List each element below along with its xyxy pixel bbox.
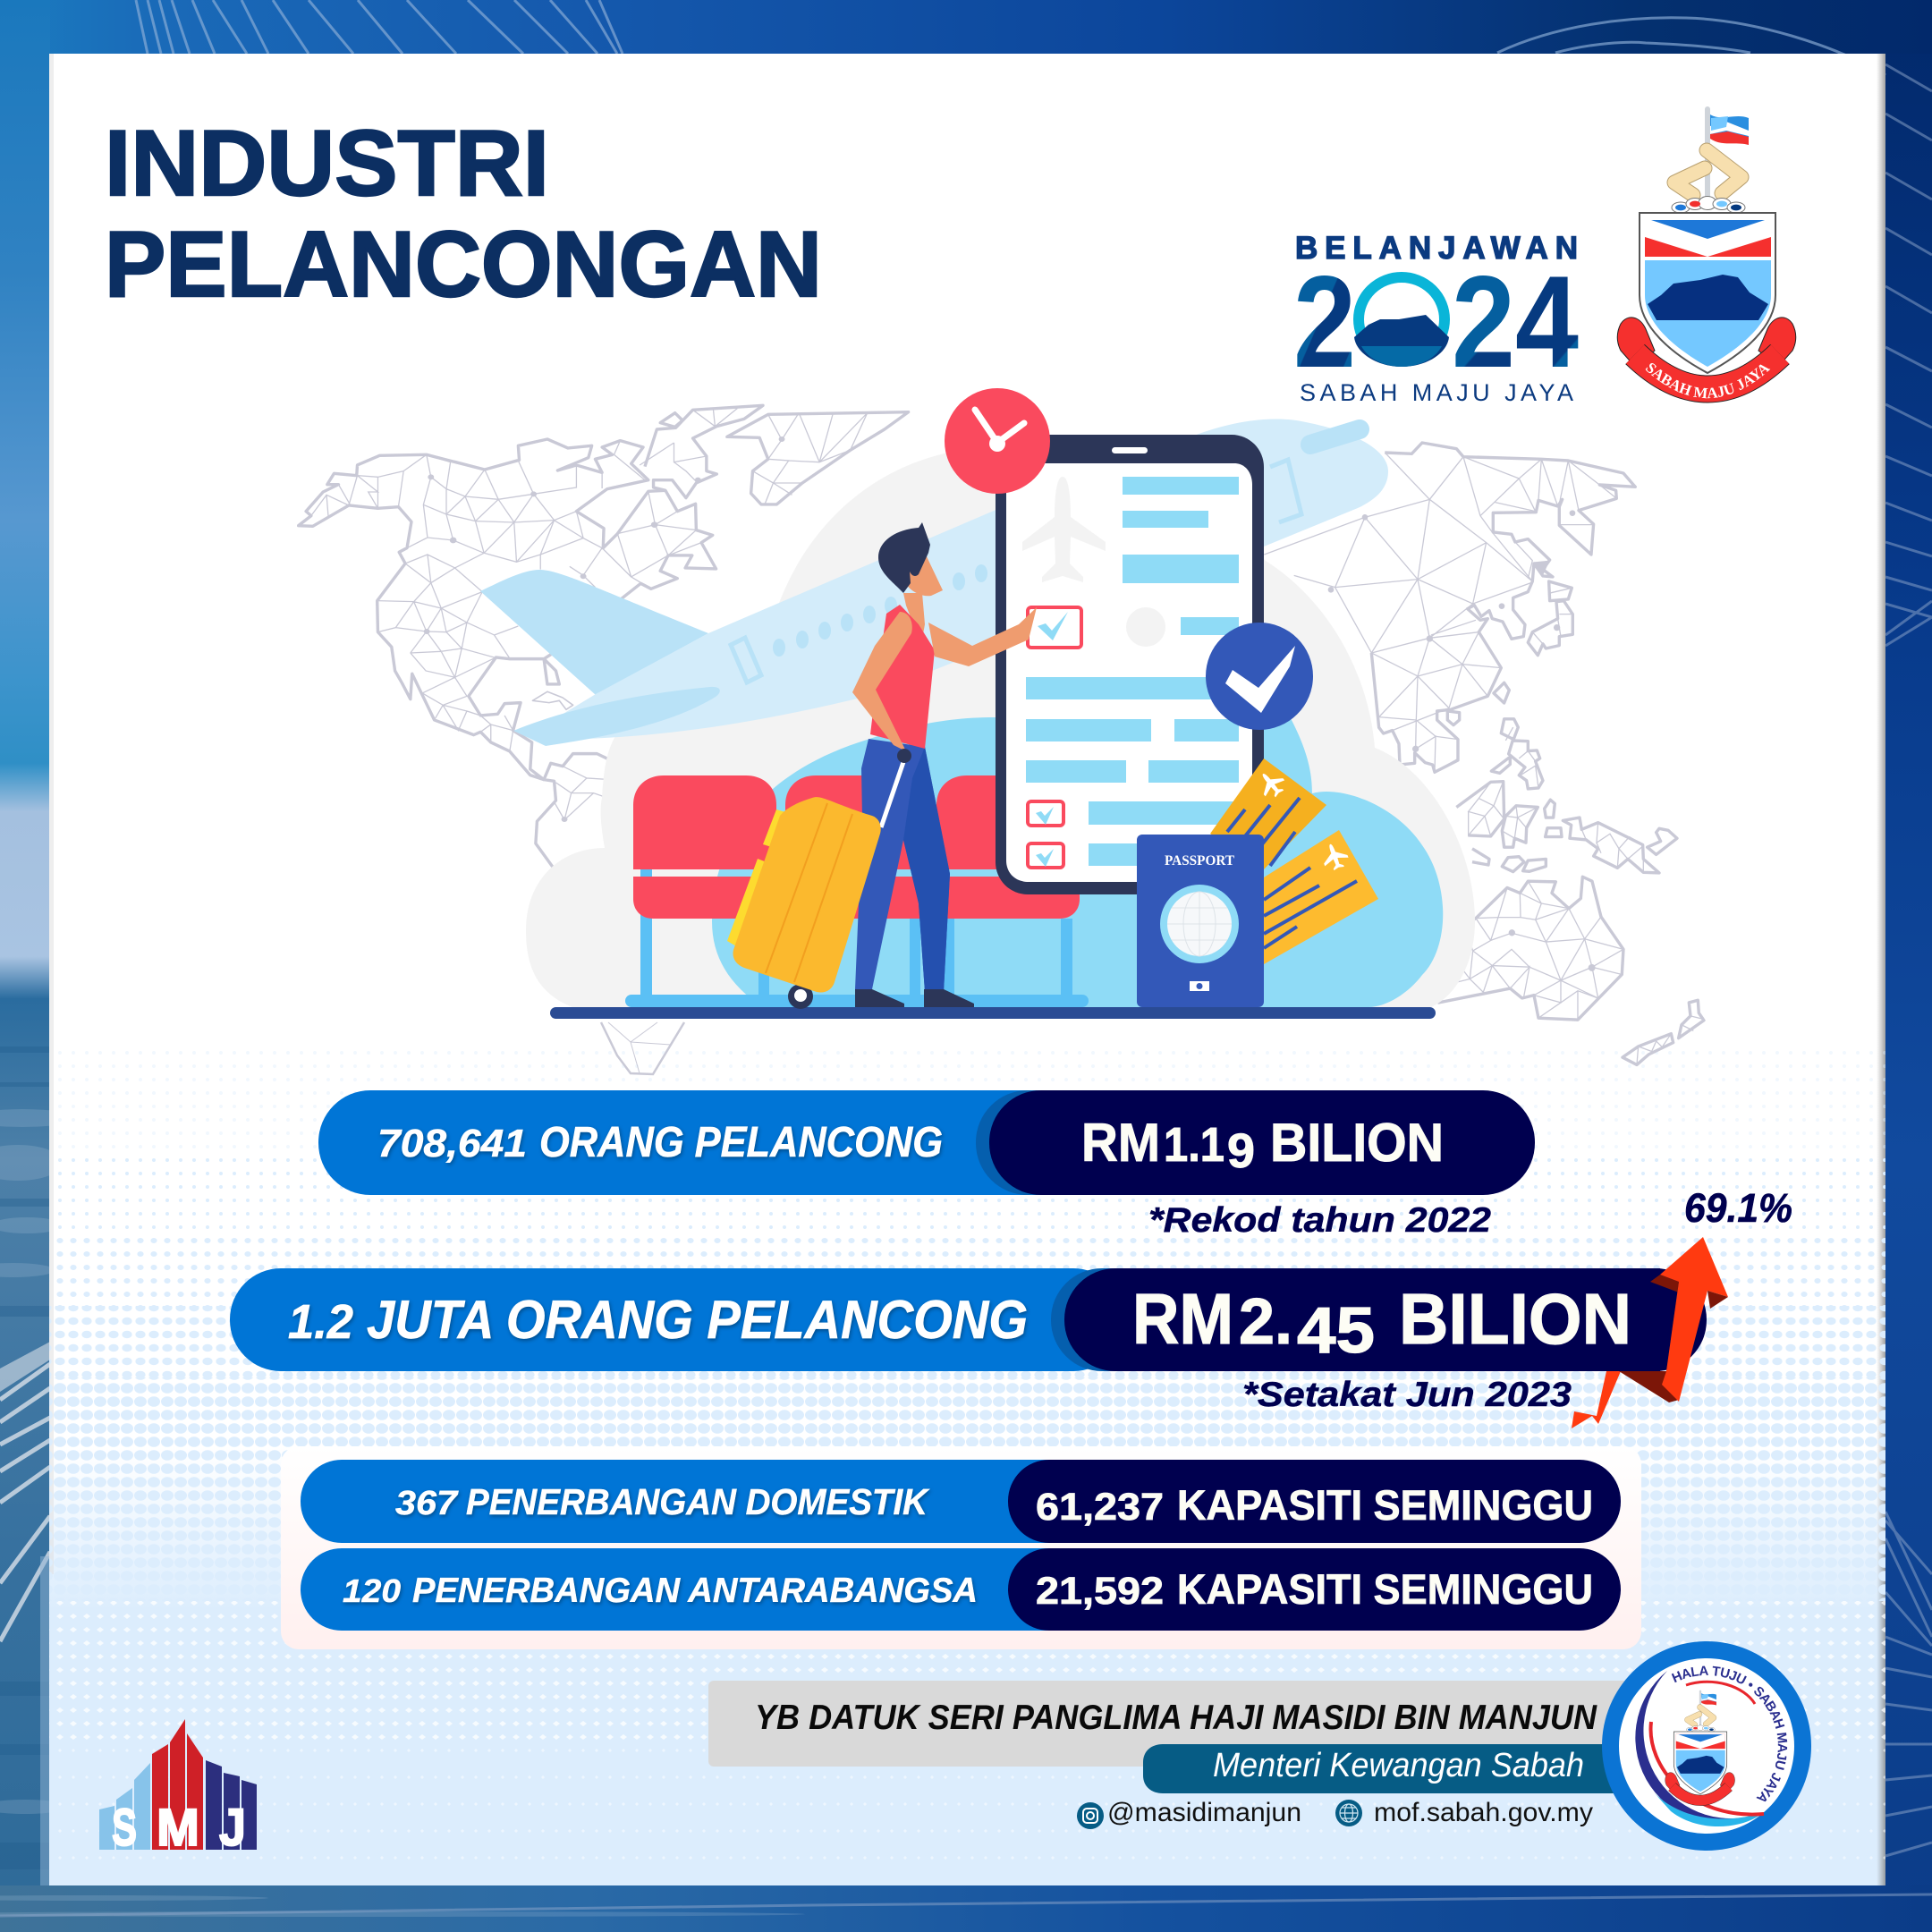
- world map: polygon mesh continents: [299, 405, 1704, 1074]
- map: Americas: [299, 405, 909, 869]
- stat bar: June 2023 tourists and revenue: BILION: [1399, 1279, 1631, 1359]
- flights: domestic row: KAPASITI SEMINGGU: [1177, 1481, 1593, 1529]
- logo: Belanjawan 2024: 24: [1452, 249, 1579, 394]
- logo: SMJ: M: [157, 1799, 199, 1857]
- stat bar: 2022 tourists and revenue: 1.1: [1164, 1118, 1224, 1172]
- minister title plate: [1143, 1744, 1637, 1793]
- growth percentage: 69.1%: [1684, 1185, 1792, 1231]
- cloud backdrop: [526, 443, 1475, 1007]
- stat bar: June 2023 tourists and revenue: 1.2: [288, 1295, 353, 1349]
- panel: flights and weekly capacity: [281, 1446, 1641, 1649]
- passport: PASSPORT: [1165, 853, 1234, 869]
- phone: checkboxes: [1028, 607, 1081, 868]
- stat bar: June 2023 tourists and revenue: 45: [1297, 1295, 1375, 1367]
- clock badge: [945, 388, 1050, 494]
- minister name plate: [708, 1681, 1639, 1767]
- map: southern tip: [601, 1022, 684, 1074]
- flights: international row: KAPASITI SEMINGGU: [1177, 1565, 1593, 1613]
- logo: Belanjawan 2024: 2: [1293, 249, 1356, 394]
- minister name plate: YB DATUK SERI PANGLIMA HAJI MASIDI BIN MANJUN: [755, 1699, 1597, 1737]
- waiting chairs: [625, 775, 1089, 1007]
- map: Oceania and islands: [1430, 719, 1704, 1064]
- check badge: [1206, 623, 1313, 730]
- blue blob: [712, 698, 1443, 1007]
- passport: [1137, 835, 1264, 1007]
- growth arrow: [1572, 1237, 1728, 1428]
- flights: international row: [301, 1548, 1621, 1631]
- traveller figure: [852, 522, 1037, 1007]
- badge: mini crest: [1665, 1691, 1735, 1801]
- suitcase: [727, 797, 881, 1009]
- logo: Belanjawan 2024: [1293, 231, 1579, 406]
- note: as of June 2023: *Setakat Jun 2023: [1242, 1376, 1572, 1414]
- stat bar: 2022 tourists and revenue: [318, 1090, 1535, 1195]
- logo: SMJ: J: [219, 1799, 246, 1857]
- note: 2022 record: *Rekod tahun 2022: [1148, 1201, 1491, 1240]
- title: PELANCONGAN: [105, 213, 822, 317]
- stat bar: 2022 tourists and revenue: 9: [1227, 1124, 1255, 1178]
- map: Eurasia and Japan: [1264, 443, 1635, 772]
- badge: Hala Tuju Sabah Maju Jaya: [1602, 1641, 1811, 1851]
- logo: Belanjawan 2024: SABAH MAJU JAYA: [1300, 379, 1573, 406]
- phone: plane silhouette: [1022, 477, 1106, 582]
- flights: domestic row: PENERBANGAN DOMESTIK: [466, 1481, 930, 1522]
- airplane: [480, 419, 1388, 746]
- smartphone: [996, 435, 1264, 894]
- stat bar: 2022 tourists and revenue: BILION: [1270, 1113, 1444, 1173]
- minister title plate: Menteri Kewangan Sabah: [1213, 1747, 1584, 1784]
- tickets: [1210, 758, 1378, 964]
- stat bar: June 2023 tourists and revenue: [230, 1268, 1707, 1371]
- ground line: [550, 1007, 1436, 1019]
- title: INDUSTRI: [105, 112, 549, 216]
- halftone dot pattern: [49, 1046, 1885, 1878]
- flights: international row: 120: [343, 1572, 401, 1609]
- logo: SMJ: [99, 1719, 257, 1857]
- phone: form bars: [1026, 477, 1239, 866]
- flights: international row: PENERBANGAN ANTARABANGSA: [412, 1572, 978, 1610]
- title: [105, 112, 822, 317]
- logo: SMJ: S: [112, 1799, 137, 1857]
- logo: Belanjawan 2024: BELANJAWAN: [1295, 231, 1578, 266]
- logo: Sabah state crest: SABAH MAJU JAYA: [1646, 363, 1771, 399]
- flights: domestic row: 367: [395, 1485, 459, 1522]
- illustration: traveller checking in with phone: [480, 388, 1475, 1019]
- stat bar: June 2023 tourists and revenue: 2.: [1239, 1286, 1292, 1358]
- stat bar: June 2023 tourists and revenue: JUTA ORANG PELANCONG: [367, 1290, 1028, 1350]
- flights: domestic row: [301, 1460, 1621, 1543]
- website: mof.sabah.gov.my: [1374, 1798, 1593, 1827]
- badge: Hala Tuju Sabah Maju Jaya: HALA TUJU • SABAH MAJU JAYA: [1671, 1665, 1787, 1801]
- stat bar: June 2023 tourists and revenue: RM: [1132, 1279, 1233, 1359]
- flights: international row: 21,592: [1036, 1570, 1164, 1613]
- stat bar: 2022 tourists and revenue: RM: [1081, 1113, 1160, 1173]
- social handle: @masidimanjun: [1107, 1798, 1301, 1827]
- stat bar: 2022 tourists and revenue: 708,641: [377, 1122, 527, 1165]
- stat bar: 2022 tourists and revenue: ORANG PELANCONG: [539, 1119, 943, 1166]
- logo: Sabah state crest: [1617, 106, 1796, 402]
- flights: domestic row: 61,237: [1036, 1486, 1164, 1529]
